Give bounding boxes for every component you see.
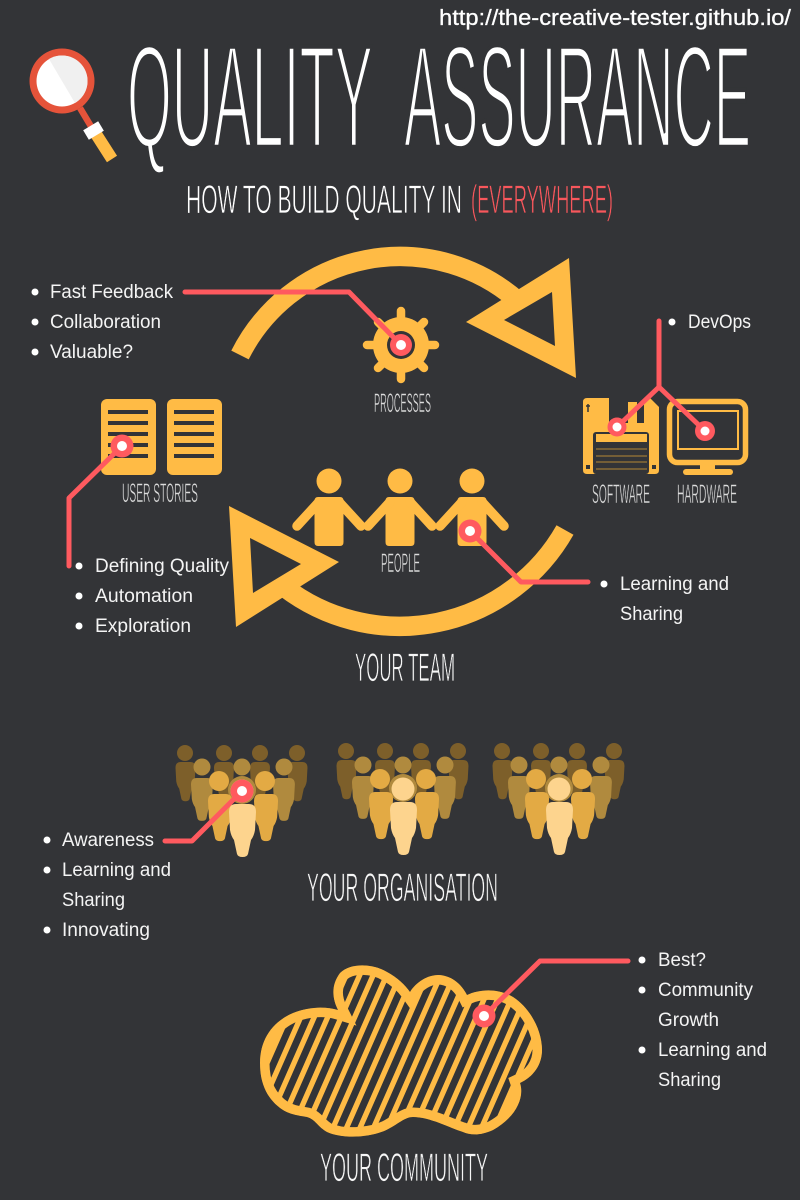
text: YOUR TEAM xyxy=(355,646,455,690)
list: user stories: Defining Quality xyxy=(95,556,229,577)
text: PROCESSES xyxy=(374,388,431,418)
list: processes: Valuable? xyxy=(50,342,133,363)
text: YOUR COMMUNITY xyxy=(320,1146,488,1190)
callout: fast feedback connector xyxy=(185,292,412,356)
text: (EVERYWHERE) xyxy=(471,178,613,222)
callout: people connector xyxy=(458,520,588,582)
list: organisation xyxy=(44,830,171,941)
list: people xyxy=(600,574,729,625)
list: processes: Fast Feedback xyxy=(50,282,173,303)
icon: people holding hands xyxy=(297,468,504,546)
list: user stories: Automation xyxy=(95,586,193,607)
source url: http://the-creative-tester.github.io/ xyxy=(439,5,792,30)
list: organisation: Awareness xyxy=(62,830,154,851)
callout: devops connector xyxy=(608,321,715,441)
list: devops: DevOps xyxy=(688,312,751,333)
callout: user stories connector xyxy=(69,434,134,566)
crowd: group two xyxy=(336,743,468,855)
callout: organisation connector xyxy=(165,780,254,841)
list: people: Sharing xyxy=(620,604,683,625)
text: YOUR ORGANISATION xyxy=(307,866,498,910)
list: organisation: Innovating xyxy=(62,920,150,941)
crowd: group one xyxy=(176,745,307,857)
list: community: Learning and xyxy=(658,1040,767,1061)
crowd: group three xyxy=(492,743,624,855)
list: user stories: Exploration xyxy=(95,616,191,637)
list: community: Community xyxy=(658,980,753,1001)
text: USER STORIES xyxy=(122,478,198,508)
list: processes: Collaboration xyxy=(50,312,161,333)
title: QUALITY xyxy=(127,15,373,178)
icon: striped cloud xyxy=(260,965,542,1137)
text: PEOPLE xyxy=(381,548,420,578)
list: community: Growth xyxy=(658,1010,719,1031)
icon: gear (processes) xyxy=(367,311,435,379)
icon: user story documents xyxy=(101,399,222,475)
list: organisation: Learning and xyxy=(62,860,171,881)
list: community: Sharing xyxy=(658,1070,721,1091)
list: organisation: Sharing xyxy=(62,890,125,911)
list: user stories xyxy=(76,556,229,637)
icon: magnifying glass xyxy=(30,48,112,159)
text: SOFTWARE xyxy=(592,479,650,509)
callout: community connector xyxy=(472,961,628,1028)
subtitle: HOW TO BUILD QUALITY IN xyxy=(186,178,462,222)
list: community xyxy=(638,950,767,1091)
icon: floppy disk (software) xyxy=(583,398,659,474)
cycle arrow: top xyxy=(240,256,576,378)
icon: monitor (hardware) xyxy=(670,402,746,475)
list: community: Best? xyxy=(658,950,706,971)
list: people: Learning and xyxy=(620,574,729,595)
list: processes xyxy=(32,282,173,363)
cycle arrow: bottom xyxy=(229,506,565,627)
